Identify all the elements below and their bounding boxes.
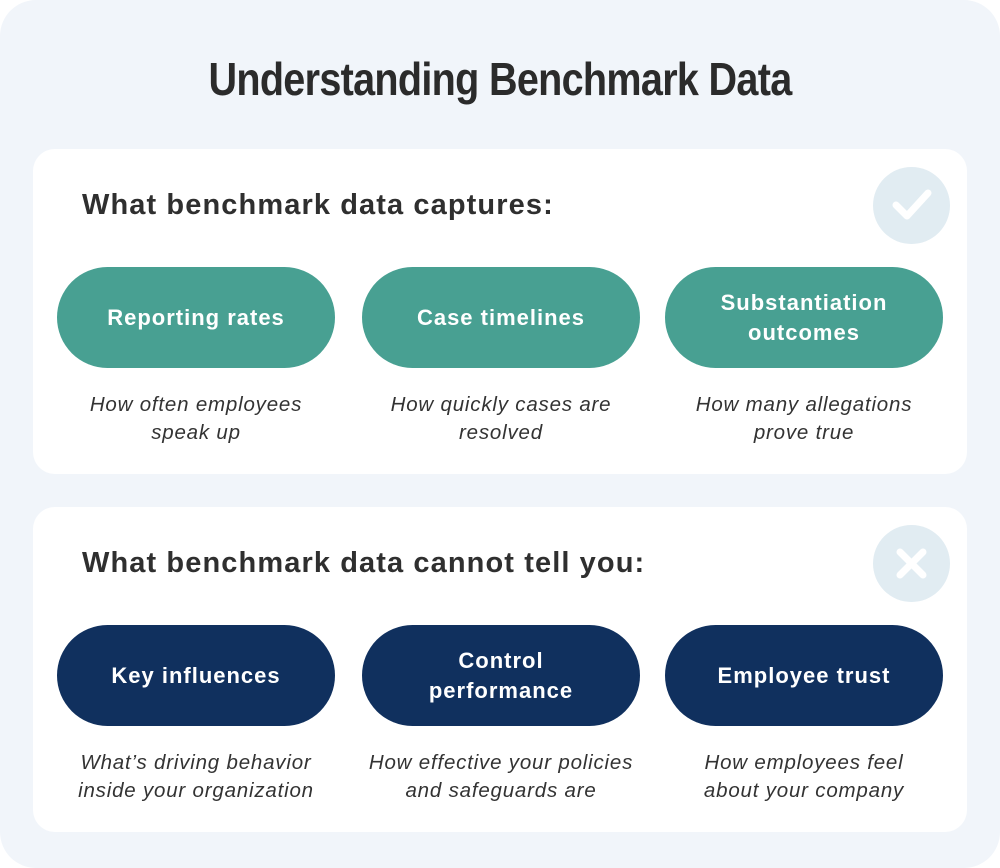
pill: substantiation outcomes: outcomes — [748, 320, 860, 344]
desc: substantiation: prove true — [754, 421, 854, 444]
pill: reporting rates — [57, 267, 335, 368]
pill: case timelines: Case timelines — [417, 304, 585, 330]
heading: cannot tell: What benchmark data cannot tell you: — [82, 547, 645, 579]
pill: employee trust: Employee trust — [718, 662, 890, 688]
pill: key influences — [57, 625, 335, 726]
desc: reporting rates: How often employees — [90, 393, 302, 416]
icon: check — [873, 167, 950, 244]
desc: control performance — [369, 751, 633, 802]
pill: employee trust — [665, 625, 943, 726]
desc: control performance: and safeguards are — [405, 779, 597, 802]
desc: reporting rates: speak up — [151, 421, 241, 444]
title: Understanding Benchmark Data — [208, 53, 792, 105]
desc: case timelines: How quickly cases are — [391, 393, 611, 416]
desc: key influences — [78, 751, 314, 802]
desc: case timelines — [391, 393, 611, 444]
desc: substantiation: How many allegations — [696, 393, 912, 416]
heading: captures: What benchmark data captures: — [82, 189, 554, 221]
panel: cannot tell — [33, 507, 967, 832]
desc: control performance: How effective your policies — [369, 751, 633, 774]
icon: x — [873, 525, 950, 602]
pill: key influences: Key influences — [111, 662, 281, 688]
pill: control performance: Control — [458, 648, 544, 672]
pill: case timelines — [362, 267, 640, 368]
panel: captures — [33, 149, 967, 474]
desc: employee trust: about your company — [704, 779, 904, 802]
desc: employee trust: How employees feel — [704, 751, 904, 774]
desc: key influences: inside your organization — [78, 779, 314, 802]
desc: key influences: What’s driving behavior — [80, 751, 312, 774]
pill: control performance: performance — [429, 678, 573, 702]
pill: substantiation outcomes — [665, 267, 943, 368]
desc: employee trust — [704, 751, 904, 802]
pill: control performance — [362, 625, 640, 726]
desc: case timelines: resolved — [459, 421, 543, 444]
desc: reporting rates — [90, 393, 302, 444]
pill: reporting rates: Reporting rates — [107, 304, 285, 330]
desc: substantiation — [696, 393, 912, 444]
pill: substantiation outcomes: Substantiation — [721, 290, 887, 314]
